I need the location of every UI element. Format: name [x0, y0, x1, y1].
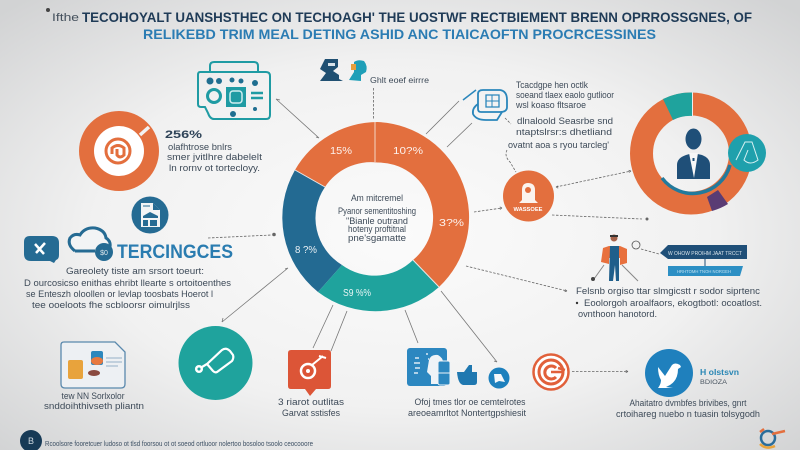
icon: blue chat device: [463, 90, 507, 120]
donut percentage labels: 10?%: [393, 146, 423, 157]
arrow: device to donut: [276, 99, 319, 138]
arrows: left connectors: [208, 233, 347, 351]
title: TECOHOYALT UANSHSTHEC ON TECHOAGH' THE UOSTWF RECTBIEMENT BRENN OPRROSSGNES, OF: [82, 9, 752, 25]
banner: light blue: HRHTOMH TNOH NORGEH: [677, 269, 731, 274]
icon: red target: [534, 354, 568, 390]
footer: logo and text: B: [28, 436, 34, 446]
text: right middle block: Felsnb orgiso ttar slmgicstt r sodor siprtenc: [576, 286, 761, 296]
icon group: blue social tiles: [407, 348, 510, 388]
footer: logo and text: [20, 430, 313, 450]
stat text: left: smer jvitlhre dabelelt: [167, 152, 263, 162]
icon: worker figure: [591, 234, 638, 281]
text: bird caption: Ahaitatro dvmbfes brivibes, gnrt: [630, 398, 747, 408]
heading: TERCINGES: TERCINGCES: [117, 242, 233, 263]
title: [46, 8, 752, 42]
donut percentage labels: 15%: [330, 146, 352, 157]
text: right top block: [508, 80, 614, 150]
text block: left: tee ooeloots fhe scbloorsr oimulrjlss: [32, 300, 191, 310]
donut percentage labels: [295, 146, 464, 299]
arrows: badge connectors: [474, 170, 648, 220]
connector: top label to donut: [372, 88, 374, 120]
text: social caption: areoeamrltot Nontertgpshiesit: [408, 408, 526, 418]
stat text: left: olafhtrose bnlrs: [168, 142, 233, 152]
text block: left: se Enteszh oloollen or levlap toosbats Hoerot l: [26, 289, 213, 299]
icon: blue document circle: [132, 196, 168, 234]
right donut chart: [642, 92, 766, 211]
text: social caption: [408, 397, 526, 418]
text: pin caption: Garvat sstisfes: [282, 408, 340, 418]
text block: left: D ourcosicso enithas ehribt llearte s ortoitoenthes: [24, 278, 232, 288]
arrows: bottom right connectors: [405, 266, 567, 362]
main donut chart: [282, 122, 469, 311]
text: right middle block: Eoolorgoh aroalfaors, ekogtbotl: ocoatlost.: [584, 298, 762, 308]
donut percentage labels: 8 ?%: [295, 245, 317, 256]
arrow: target to bird: [572, 370, 628, 373]
text: social caption: Ofoj tmes tlor oe cemtelrotes: [414, 397, 526, 407]
text: bird caption: [616, 398, 760, 419]
footer: logo and text: Rcoolsore fooretcuer ludoso ot tlsd foorsou ot ot soeod ortluoor nolertoo bosoloo tsoolo ceocooore: [45, 439, 313, 448]
panel: orange stat donut: [79, 111, 159, 191]
donut percentage labels: S9 %%: [343, 288, 371, 299]
icon: teal device: [198, 62, 270, 119]
donut centre text: "Bianle outrand: [346, 216, 408, 226]
icon: cloud: [69, 228, 113, 261]
text: pin caption: [278, 397, 345, 418]
title: Ifthe: [52, 12, 79, 24]
donut centre text: [338, 193, 416, 243]
arrows: chat device connectors: [426, 101, 516, 172]
donut percentage labels: 3?%: [439, 218, 464, 229]
text: right top block: ovatnt aoa s ryou tarcleg': [508, 140, 609, 150]
text: right top block: wsl koaso fltsaroe: [515, 100, 586, 110]
icon: business person: [677, 128, 710, 179]
donut centre text: pne'sgamatte: [348, 233, 406, 243]
text block: left: [24, 266, 232, 310]
text: bird label: BDIOZA: [700, 379, 728, 386]
text: document caption: snddoihthivseth pliantn: [44, 401, 144, 411]
text: document caption: tew NN Sorlxolor: [62, 391, 124, 401]
text: bird label: [700, 368, 739, 386]
donut centre text: Pyanor sementitoshing: [338, 206, 416, 216]
text: document caption: [44, 391, 144, 411]
badge: orange alert circle: [503, 170, 554, 222]
badge: orange alert circle: WASSOEE: [514, 207, 543, 213]
text: right middle block: [576, 286, 762, 319]
icon: teal circle key: [178, 326, 252, 400]
icon: document folder: [61, 342, 125, 388]
icon: red pin target: [288, 350, 331, 396]
icon: cloud: $0: [100, 250, 108, 257]
small connector to banner: [632, 241, 659, 254]
icon: blue bird circle: [645, 349, 693, 397]
text: right top block: dlnaloold Seasrbe snd: [517, 116, 613, 126]
banner: dark blue: W OHOW PROIHM JAAT TRCCT: [668, 251, 743, 257]
text: right middle block: ovnthoon hanotord.: [578, 309, 657, 319]
stat text: left: 256%: [165, 129, 202, 141]
text: bird label: H oIstsvn: [700, 368, 739, 377]
stat text: left: [165, 129, 263, 173]
text block: left: Gareolety tiste am srsort toeurt:: [66, 266, 204, 276]
stat text: left: ln rornv ot tortecloyy.: [169, 163, 260, 173]
footer logo: right: [760, 429, 785, 448]
icon: message bubble with X: [24, 236, 59, 263]
text: top label: Ghlt eoef eirrre: [370, 75, 429, 85]
icon: teal and blue figures top: [320, 59, 367, 81]
text: right top block: ntaptslrsr:s dhetliand: [516, 127, 612, 137]
banner: light blue: [668, 266, 743, 276]
donut centre text: Am mitcremel: [351, 193, 403, 203]
title: RELIKEBD TRIM MEAL DETING ASHID ANC TIAICAOFTN PROCRCESSINES: [143, 26, 656, 42]
text: right top block: Tcacdgpe hen octlk: [516, 80, 588, 90]
icon: swirl: [106, 139, 130, 163]
text: right top block: soeand tlaex eaolo gutlioor: [516, 90, 614, 100]
text: bird caption: crtoihareg nuebo n tuasin tolsygodh: [616, 409, 760, 419]
banner: dark blue: [660, 245, 747, 266]
text: pin caption: 3 riarot outlitas: [278, 397, 345, 407]
donut centre text: hoteny proftitnal: [348, 224, 406, 234]
